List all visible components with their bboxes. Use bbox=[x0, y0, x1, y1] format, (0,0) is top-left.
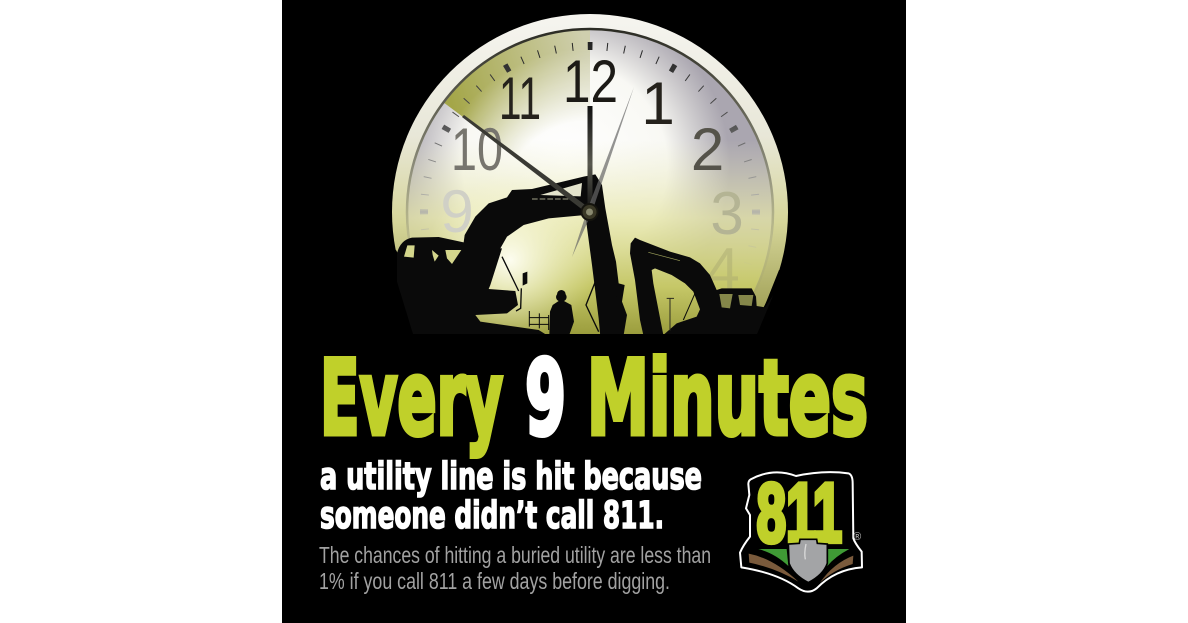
brown soil bbox=[749, 554, 798, 582]
supporting text: The chances of hitting a buried utility are less than bbox=[319, 542, 711, 568]
hour ticks bbox=[424, 46, 756, 378]
headline: Every 9 Minutes: Every bbox=[320, 339, 503, 459]
registered mark: ® bbox=[853, 531, 861, 543]
large excavator silhouette bbox=[397, 174, 627, 342]
clock numerals: 1 bbox=[641, 70, 675, 137]
cab windows bbox=[404, 245, 461, 264]
clock numerals: 2 bbox=[691, 116, 724, 183]
rod and hoses bbox=[502, 257, 616, 332]
811 logo bbox=[740, 467, 862, 592]
clock with excavator silhouettes bbox=[392, 14, 788, 334]
clock numerals: 9 bbox=[440, 178, 474, 245]
minute ticks bbox=[424, 46, 756, 378]
utility pole bbox=[667, 298, 674, 331]
shovel highlight bbox=[805, 544, 806, 559]
clock numerals bbox=[440, 48, 744, 303]
supporting text bbox=[319, 542, 711, 594]
light gap between strut and boom bbox=[540, 183, 582, 196]
headline: Every 9 Minutes bbox=[320, 339, 868, 459]
rod bbox=[683, 293, 695, 320]
clock numerals: 10 bbox=[451, 116, 503, 183]
outer lower corners fading to black bbox=[380, 240, 800, 340]
clock rim bbox=[392, 14, 788, 410]
clock numerals: 3 bbox=[710, 180, 744, 247]
clock hands bbox=[462, 87, 634, 257]
scaffold bbox=[529, 311, 549, 330]
infographic canvas bbox=[282, 0, 906, 623]
clock hub bbox=[582, 204, 598, 220]
green leaves bbox=[758, 549, 788, 566]
black poster panel bbox=[282, 0, 906, 623]
clock face bbox=[408, 30, 772, 334]
green nine-minute wedge bbox=[444, 30, 590, 152]
face inner ring bbox=[407, 29, 773, 395]
clock numerals: 12 bbox=[563, 48, 618, 115]
subheading bbox=[320, 454, 702, 537]
clock numerals: 4 bbox=[706, 236, 740, 303]
supporting text: 1% if you call 811 a few days before digging. bbox=[319, 568, 670, 594]
shovel bbox=[788, 539, 827, 583]
headline: Every 9 Minutes: 9 bbox=[525, 339, 566, 459]
worker silhouette bbox=[549, 290, 574, 337]
subheading: a utility line is hit because bbox=[320, 454, 702, 498]
boom highlight dashes bbox=[532, 197, 570, 200]
ground mask bbox=[380, 334, 800, 424]
minute hand bbox=[462, 115, 592, 214]
work lamp bbox=[523, 272, 527, 286]
clock numerals: 11 bbox=[499, 65, 541, 132]
headline: Every 9 Minutes: Minutes bbox=[587, 339, 868, 459]
hour hand bbox=[588, 106, 592, 212]
cab windows bbox=[719, 294, 753, 308]
logo outline badge bbox=[740, 472, 862, 592]
small excavator silhouette bbox=[630, 238, 773, 335]
logo numerals 811: 811 bbox=[757, 467, 842, 560]
boom gap line bbox=[648, 252, 680, 261]
subheading: someone didn’t call 811. bbox=[320, 493, 664, 537]
second hand bbox=[572, 87, 634, 257]
